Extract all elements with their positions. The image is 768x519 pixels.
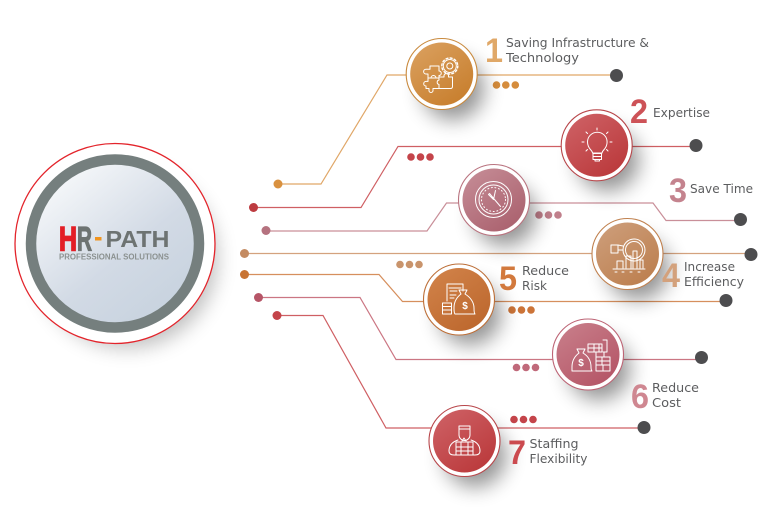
label 4 <box>662 257 745 295</box>
label 3: 3 <box>669 172 687 210</box>
icon: dollar sign: $ <box>462 301 468 312</box>
node 2: expertise <box>561 110 639 191</box>
connector 6 <box>254 293 708 371</box>
logo: HR-PATH: PATH <box>106 226 170 252</box>
connector 2 <box>249 139 702 212</box>
icon: light bulb <box>582 128 612 161</box>
label 4: Increase <box>684 259 735 274</box>
connector 5 <box>240 270 732 314</box>
icon: magnifier and chart <box>611 239 645 272</box>
connector 1 <box>274 69 623 188</box>
label 3 <box>669 172 753 210</box>
logo: HR-PATH: H <box>59 220 77 258</box>
label 5: 5 <box>499 260 517 298</box>
logo: HR-PATH: R <box>77 220 92 258</box>
label 2: Expertise <box>653 105 710 120</box>
icon: clock <box>476 182 512 218</box>
label 7: Staffing <box>530 436 578 451</box>
icon: calculator and money bag <box>442 284 475 314</box>
label 4: Efficiency <box>684 274 745 289</box>
node 4: increase efficiency <box>592 218 669 300</box>
logo: HR-PATH <box>59 220 170 262</box>
connector 3 <box>262 203 747 235</box>
label 5 <box>499 260 569 298</box>
icon: person with boxes <box>449 426 480 455</box>
icon: dollar sign: $ <box>578 358 584 369</box>
label 1: Saving Infrastructure & <box>506 35 649 50</box>
label 1: Technology <box>505 50 580 65</box>
label 1 <box>485 32 649 70</box>
connector 7 <box>272 311 650 434</box>
label 7 <box>508 434 588 472</box>
label 6: Cost <box>652 395 681 410</box>
node 7: staffing flexibility <box>429 406 506 487</box>
label 3: Save Time <box>690 181 753 196</box>
label 2: 2 <box>630 93 648 131</box>
connector 4 <box>240 248 758 268</box>
label 2 <box>630 93 710 131</box>
label 6: Reduce <box>652 380 699 395</box>
logo: HR-PATH: PROFESSIONAL SOLUTIONS <box>59 252 170 262</box>
label 6 <box>631 378 699 416</box>
label 5: Risk <box>522 278 548 293</box>
icon: money bag and bills <box>572 340 610 371</box>
main logo circle <box>15 144 217 348</box>
label 7: Flexibility <box>530 451 588 466</box>
label 1: 1 <box>485 32 503 70</box>
label 6: 6 <box>631 378 649 416</box>
label 7: 7 <box>508 434 526 472</box>
node 1: saving infrastructure <box>406 38 484 120</box>
node 5: reduce risk <box>424 264 501 345</box>
icon: puzzle and gear <box>424 58 458 92</box>
label 4: 4 <box>662 257 680 295</box>
node 6: reduce cost <box>552 319 630 400</box>
label 5: Reduce <box>522 263 569 278</box>
node 3: save time <box>458 164 536 246</box>
